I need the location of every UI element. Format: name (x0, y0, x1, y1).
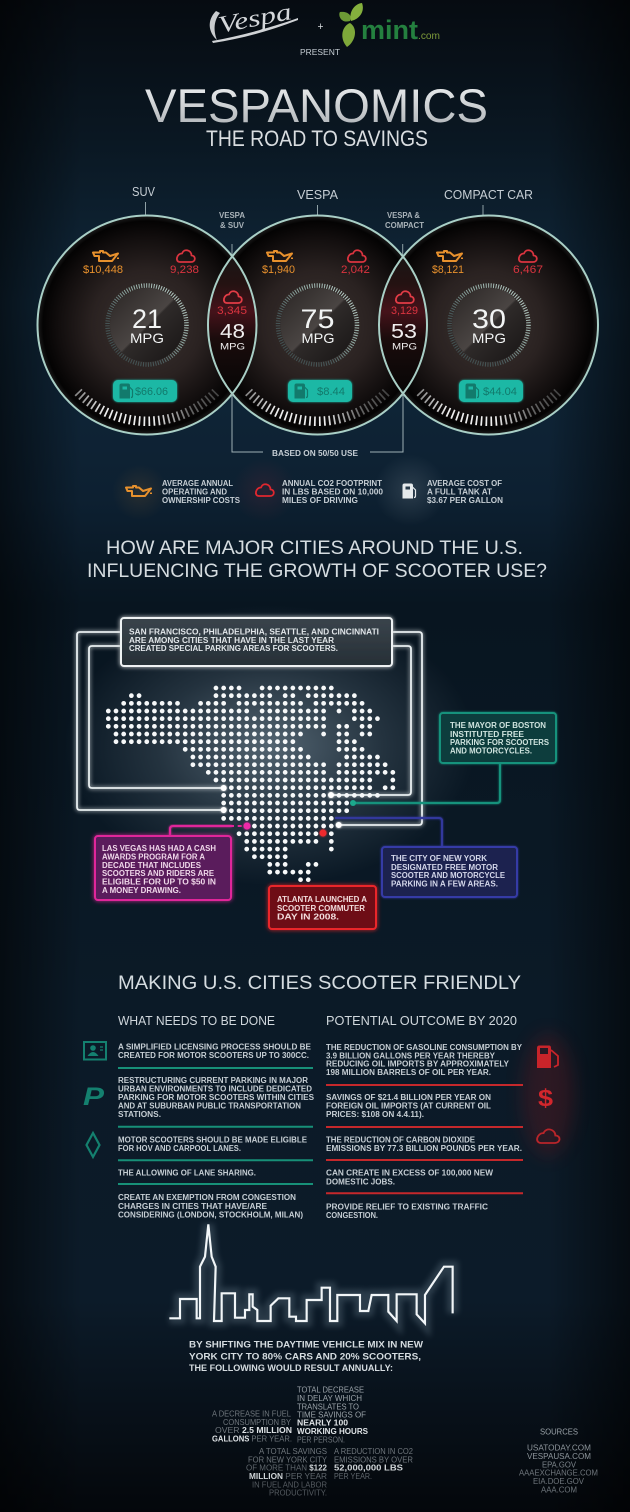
legend item: full tank cost: $3.67 PER GALLON (427, 496, 503, 505)
column: what needs to be done (83, 1013, 315, 1219)
skyline illustration (169, 1224, 453, 1323)
new york scenario text: BY SHIFTING THE DAYTIME VEHICLE MIX IN NEW (189, 1340, 423, 1351)
item texts: MOTOR SCOOTERS SHOULD BE MADE ELIGIBLE (118, 1135, 308, 1144)
circle labels and stems: VESPA (297, 188, 339, 202)
overlap lens: vespa and compact (379, 256, 427, 394)
circle labels and stems: SUV (132, 185, 156, 199)
callout: Las Vegas: ELIGIBLE FOR UP TO $50 IN (102, 878, 216, 886)
new york scenario text (189, 1340, 423, 1374)
circle labels and stems: & SUV (220, 221, 245, 230)
overlap stats: vespa and compact: 3,129 (391, 305, 418, 317)
icon: fuel pump (537, 1046, 558, 1068)
column heading: WHAT NEEDS TO BE DONE (118, 1013, 275, 1028)
callout: Boston: INSTITUTED FREE (450, 730, 525, 739)
heading: major cities: INFLUENCING THE GROWTH OF SCOOTER USE? (87, 560, 547, 582)
title: VESPANOMICS (145, 79, 488, 132)
callout: New York (335, 818, 517, 897)
column: potential outcome (326, 1013, 574, 1220)
result: co2 reduction (334, 1447, 414, 1481)
gauge: Compact car: 30 (472, 304, 506, 334)
callout: Las Vegas: A MONEY DRAWING. (102, 886, 181, 895)
result: total savings: OF MORE THAN $122 (246, 1464, 328, 1473)
result: delay decrease: TRANSLATES TO (297, 1402, 359, 1411)
item texts: EMISSIONS BY 77.3 BILLION POUNDS PER YEAR. (326, 1144, 522, 1153)
item texts: FOREIGN OIL IMPORTS (AT CURRENT OIL (326, 1102, 491, 1111)
icon: parking P: P (83, 1083, 104, 1111)
bracket: based on 50/50 use: BASED ON 50/50 USE (272, 449, 359, 458)
item texts: 3.9 BILLION GALLONS PER YEAR THEREBY (326, 1051, 496, 1060)
callout: Boston: THE MAYOR OF BOSTON (450, 721, 546, 730)
item texts: 198 MILLION BARRELS OF OIL PER YEAR. (326, 1068, 491, 1077)
result: total savings: IN FUEL AND LABOR (252, 1480, 327, 1489)
item texts: THE REDUCTION OF CARBON DIOXIDE (326, 1135, 476, 1144)
overlap stats: vespa and compact (391, 291, 418, 352)
callout: Boston (350, 713, 556, 806)
result: total savings: MILLION PER YEAR (249, 1472, 327, 1481)
callout: New York: THE CITY OF NEW YORK (391, 854, 487, 863)
legend (112, 454, 503, 526)
new york scenario text: THE FOLLOWING WOULD RESULT ANNUALLY: (189, 1363, 393, 1374)
circle labels and stems: VESPA & (387, 211, 420, 220)
circle labels and stems: VESPA (219, 211, 245, 220)
callout: Atlanta (269, 830, 376, 929)
callout: Atlanta: ATLANTA LAUNCHED A (277, 895, 367, 904)
circle discs (38, 216, 598, 434)
item texts: FOR HOV AND CARPOOL LANES. (118, 1144, 241, 1153)
logo: mint.com: mint (361, 15, 418, 45)
legend item: operating costs: OPERATING AND (162, 488, 227, 496)
dividers (118, 1068, 313, 1184)
legend item: full tank cost (374, 454, 503, 526)
result: fuel consumption: A DECREASE IN FUEL (212, 1410, 292, 1419)
callout: Boston: AND MOTORCYCLES. (450, 746, 532, 756)
legend item: co2 footprint: MILES OF DRIVING (282, 496, 358, 505)
item texts: CAN CREATE IN EXCESS OF 100,000 NEW (326, 1169, 493, 1178)
result: delay decrease: WORKING HOURS (297, 1427, 369, 1436)
legend item: operating costs (112, 464, 241, 520)
callout: Las Vegas (95, 822, 250, 900)
gauge: SUV (78, 286, 216, 421)
legend item: operating costs: AVERAGE ANNUAL (162, 479, 233, 488)
result: fuel consumption: GALLONS PER YEAR. (212, 1434, 292, 1443)
heading: scooter friendly: MAKING U.S. CITIES SCOOTER FRIENDLY (118, 973, 521, 994)
result: fuel consumption (212, 1410, 292, 1443)
icon: licence card (84, 1042, 106, 1060)
callout: Las Vegas: AWARDS PROGRAM FOR A (102, 852, 205, 862)
item texts: CREATE AN EXEMPTION FROM CONGESTION (118, 1193, 296, 1202)
result: fuel consumption: CONSUMPTION BY (223, 1418, 292, 1427)
sources: AAAEXCHANGE.COM (519, 1469, 598, 1478)
icon: diamond (86, 1133, 100, 1157)
result: delay decrease: PER PERSON. (297, 1435, 345, 1444)
callout: New York: DESIGNATED FREE MOTOR (391, 863, 498, 872)
circle outlines (38, 216, 598, 434)
callout: New York: SCOOTER AND MOTORCYCLE (391, 871, 506, 880)
result: delay decrease: NEARLY 100 (297, 1419, 349, 1428)
Compact car stats: $8,121 (432, 264, 464, 276)
legend item: full tank cost: A FULL TANK AT (427, 488, 492, 496)
circle labels and stems: COMPACT (385, 221, 424, 230)
overlap stats: vespa and suv: 48 (220, 321, 245, 343)
bracket: based on 50/50 use (232, 394, 403, 458)
gauge: Compact car (420, 286, 558, 421)
legend item: co2 footprint: ANNUAL CO2 FOOTPRINT (282, 479, 382, 488)
circle labels and stems: COMPACT CAR (444, 188, 533, 202)
overlap stats: vespa and compact: MPG (392, 342, 417, 352)
overlap stats: vespa and suv (217, 291, 247, 352)
item texts: CHARGES IN CITIES THAT HAVE/ARE (118, 1202, 268, 1211)
result: total savings (246, 1447, 328, 1497)
Vespa stats: $8.44 (317, 386, 345, 398)
result: co2 reduction: 52,000,000 LBS (334, 1464, 404, 1473)
result: co2 reduction: A REDUCTION IN CO2 (334, 1447, 414, 1456)
heading: major cities (87, 537, 547, 582)
present label: PRESENT (300, 48, 340, 57)
sources: EPA.GOV (542, 1460, 577, 1469)
overlap stats: vespa and suv: MPG (220, 342, 245, 352)
plus sign: + (318, 21, 324, 33)
Compact car stats: $44.04 (483, 386, 517, 398)
sources: VESPAUSA.COM (527, 1452, 591, 1461)
sources (519, 1427, 598, 1494)
item texts: SAVINGS OF $21.4 BILLION PER YEAR ON (326, 1093, 491, 1102)
result: delay decrease: IN DELAY WHICH (297, 1394, 362, 1403)
gauge: SUV: 21 (132, 304, 162, 334)
callout: top white box: ARE AMONG CITIES THAT HAVE IN THE LAST YEAR (129, 636, 334, 645)
callout: top white box (121, 618, 392, 666)
icon: cloud (537, 1129, 560, 1143)
item texts: DOMESTIC JOBS. (326, 1177, 395, 1186)
legend item: co2 footprint: IN LBS BASED ON 10,000 (282, 488, 384, 496)
SUV stats: $66.06 (135, 386, 168, 398)
legend item: operating costs: OWNERSHIP COSTS (162, 496, 241, 505)
result: fuel consumption: OVER 2.5 MILLION (215, 1426, 292, 1435)
item texts: CONGESTION. (326, 1211, 378, 1220)
logo: Vespa (210, 0, 298, 43)
item texts (118, 1042, 315, 1219)
result: delay decrease: TIME SAVINGS OF (297, 1411, 366, 1420)
sources: AAA.COM (541, 1485, 577, 1494)
connector endpoints: white (221, 785, 342, 828)
result: co2 reduction: PER YEAR. (334, 1472, 372, 1481)
annual results (212, 1386, 414, 1497)
item texts: PRICES: $108 ON 4.4.11). (326, 1110, 424, 1119)
subtitle: THE ROAD TO SAVINGS (206, 126, 428, 151)
gauge: Vespa: MPG (302, 330, 334, 346)
overlap stats: vespa and compact: 53 (391, 321, 417, 343)
Compact car stats (432, 250, 543, 402)
connector lines: white (77, 632, 422, 825)
new york scenario text: YORK CITY TO 80% CARS AND 20% SCOOTERS, (189, 1352, 421, 1363)
venn comparison of gauges (38, 185, 598, 458)
result: total savings: PRODUCTIVITY. (269, 1488, 327, 1497)
item texts: RESTRUCTURING CURRENT PARKING IN MAJOR (118, 1076, 308, 1085)
result: total savings: FOR NEW YORK CITY (248, 1455, 328, 1464)
Vespa stats: $1,940 (262, 264, 295, 276)
legend item: full tank cost: AVERAGE COST OF (427, 479, 502, 488)
legend item: co2 footprint (232, 458, 384, 522)
callout: top white box: SAN FRANCISCO, PHILADELPHIA, SEATTLE, AND CINCINNATI (129, 628, 379, 636)
result: co2 reduction: EMISSIONS BY OVER (334, 1455, 413, 1464)
sources: USATODAY.COM (527, 1444, 591, 1453)
SUV stats: 9,238 (170, 264, 199, 276)
callout: Las Vegas: DECADE THAT INCLUDES (102, 861, 202, 870)
logo: mint.com: .com (418, 31, 440, 42)
result: delay decrease (297, 1386, 369, 1444)
heading: major cities: HOW ARE MAJOR CITIES AROUND THE U.S. (106, 537, 523, 559)
item texts: PROVIDE RELIEF TO EXISTING TRAFFIC (326, 1202, 488, 1211)
item texts: THE ALLOWING OF LANE SHARING. (118, 1169, 256, 1178)
sources: SOURCES (540, 1427, 578, 1436)
item texts: A SIMPLIFIED LICENSING PROCESS SHOULD BE (118, 1042, 312, 1052)
callout: New York: PARKING IN A FEW AREAS. (391, 880, 498, 888)
overlap stats: vespa and suv: 3,345 (217, 305, 247, 317)
Compact car stats: 6,467 (513, 264, 543, 276)
callout: Atlanta: SCOOTER COMMUTER (277, 904, 365, 913)
sources: EIA.DOE.GOV (533, 1477, 585, 1486)
column heading: POTENTIAL OUTCOME BY 2020 (326, 1013, 517, 1028)
Vespa stats (262, 250, 370, 402)
gauge: Compact car: MPG (472, 330, 506, 346)
SUV stats (83, 250, 199, 402)
dot map with callouts (77, 618, 556, 929)
logo: mint.com (339, 3, 440, 47)
item texts: CONSIDERING (LONDON, STOCKHOLM, MILAN) (118, 1210, 303, 1219)
callout: Las Vegas: LAS VEGAS HAS HAD A CASH (102, 844, 216, 853)
logo: Vespa: Vespa (216, 0, 294, 39)
result: total savings: A TOTAL SAVINGS (259, 1447, 327, 1456)
callout: Boston: PARKING FOR SCOOTERS (450, 738, 550, 747)
item texts: URBAN ENVIRONMENTS TO INCLUDE DEDICATED (118, 1085, 312, 1094)
gauge: Vespa: 75 (300, 304, 334, 334)
item texts: CREATED FOR MOTOR SCOOTERS UP TO 300CC. (118, 1051, 309, 1060)
circle labels and stems (132, 185, 533, 256)
item texts (326, 1043, 523, 1220)
overlap lens: vespa and suv (208, 256, 256, 394)
SUV stats: $10,448 (83, 264, 123, 276)
item texts: STATIONS. (118, 1110, 161, 1119)
gauge: SUV: MPG (130, 330, 164, 346)
callout: Las Vegas: SCOOTERS AND RIDERS ARE (102, 869, 215, 878)
header logos (210, 0, 440, 57)
icon: dollar: $ (538, 1085, 554, 1112)
item texts: AND AT SUBURBAN PUBLIC TRANSPORTATION (118, 1101, 301, 1110)
gauge: Vespa (248, 286, 386, 421)
item texts: REDUCING OIL IMPORTS BY APPROXIMATELY (326, 1060, 510, 1069)
dividers (326, 1085, 523, 1193)
dot map of the USA (108, 688, 393, 880)
callout: Atlanta: DAY IN 2008. (277, 912, 339, 922)
Vespa stats: 2,042 (341, 264, 370, 276)
item texts: THE REDUCTION OF GASOLINE CONSUMPTION BY (326, 1043, 523, 1052)
glow behind red icons (522, 1033, 574, 1157)
result: delay decrease: TOTAL DECREASE (297, 1386, 364, 1395)
item texts: PARKING FOR MOTOR SCOOTERS WITHIN CITIES (118, 1093, 315, 1102)
callout: top white box: CREATED SPECIAL PARKING AREAS FOR SCOOTERS. (129, 644, 338, 653)
